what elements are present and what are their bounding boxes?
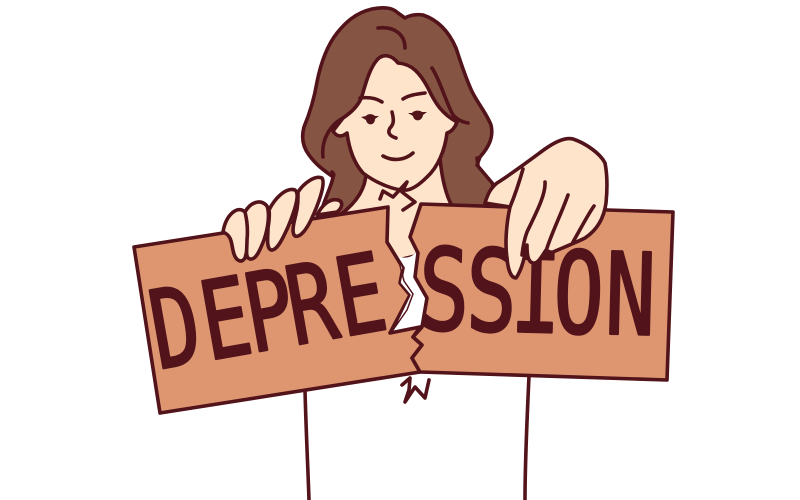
left finger 4 [293, 177, 323, 236]
neck and shoulders [340, 158, 452, 262]
face [333, 56, 457, 190]
left hand [223, 177, 342, 261]
left sign text: DEPRE [141, 231, 395, 395]
eyebrows [360, 93, 425, 102]
left thumb [317, 200, 342, 215]
neck crack mark [380, 182, 415, 210]
eyes [361, 111, 427, 124]
right finger lines [510, 169, 523, 207]
hair [303, 8, 493, 215]
left finger 2 [245, 202, 268, 259]
left finger 3 [268, 190, 297, 250]
smile [383, 153, 413, 159]
left finger 1 [223, 210, 248, 261]
white shirt [388, 252, 430, 375]
nose [389, 112, 396, 138]
woman body outline [305, 376, 529, 500]
hair strands [323, 28, 478, 177]
left sign piece [134, 207, 422, 413]
crack below sign [402, 378, 429, 402]
right sign piece [410, 204, 673, 380]
right sign text: SSION [417, 226, 657, 362]
crack sliver [393, 258, 413, 330]
right hand [485, 139, 607, 278]
